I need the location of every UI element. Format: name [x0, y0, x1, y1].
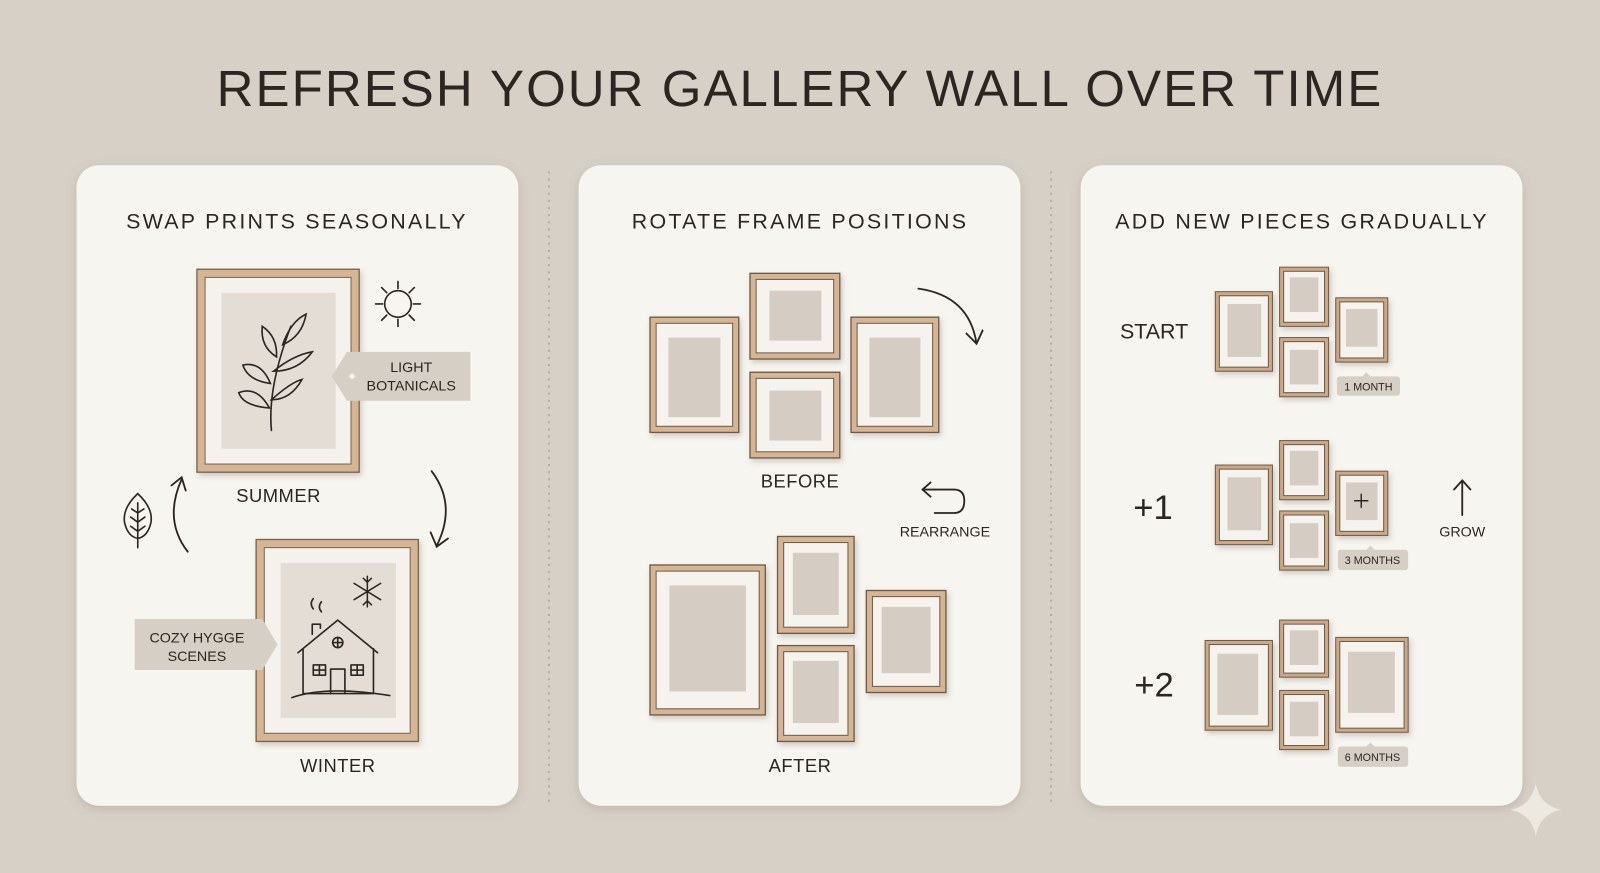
label: winter: WINTER: [300, 755, 375, 776]
callout: light botanicals: [332, 352, 470, 401]
+2 frames: [1205, 620, 1408, 750]
arrow: up cycle: [171, 477, 188, 552]
callout: cozy hygge scenes: [135, 619, 278, 670]
icon: rearrange: [922, 482, 964, 513]
heading: rotate: ROTATE FRAME POSITIONS: [632, 209, 968, 233]
panel: swap prints seasonally: [77, 165, 518, 806]
heading: swap prints: SWAP PRINTS SEASONALLY: [126, 209, 468, 233]
tag: 1 month: 1 MONTH: [1344, 382, 1392, 394]
icon: house: [292, 599, 390, 698]
tag: 3 months: 3 MONTHS: [1345, 555, 1400, 567]
title: REFRESH YOUR GALLERY WALL OVER TIME: [217, 60, 1383, 117]
label: +1: +1: [1133, 489, 1173, 527]
icon: sparkle: [1510, 783, 1561, 836]
label: before: BEFORE: [761, 470, 839, 491]
callout: light botanicals: LIGHT: [390, 360, 433, 376]
panel: add new pieces gradually: [1081, 165, 1522, 806]
heading: add new pieces: ADD NEW PIECES GRADUALLY: [1115, 209, 1489, 233]
callout: light botanicals: BOTANICALS: [367, 379, 456, 395]
arrow: down cycle: [431, 471, 448, 547]
tag: 3 months: [1338, 546, 1408, 570]
+1 frames: [1215, 441, 1388, 570]
icon: leaf: [124, 494, 151, 548]
callout: cozy hygge scenes: COZY HYGGE: [149, 631, 244, 647]
icon: grow arrow: [1454, 480, 1470, 515]
icon: sun: [376, 281, 420, 326]
label: +2: +2: [1134, 667, 1174, 705]
before frames: [650, 273, 939, 458]
label: after: AFTER: [769, 755, 831, 776]
tag: 6 months: 6 MONTHS: [1345, 752, 1400, 764]
label: start: START: [1120, 320, 1188, 344]
icon: leaf branch: [239, 314, 312, 430]
tag: 6 months: [1338, 742, 1408, 767]
label: rearrange: REARRANGE: [900, 524, 990, 540]
label: summer: SUMMER: [236, 485, 321, 506]
icon: snowflake: [354, 576, 381, 607]
arrow: rotate: [918, 289, 983, 344]
winter frame: [256, 540, 418, 741]
tag: 1 month: [1337, 372, 1400, 396]
start frames: [1215, 267, 1388, 397]
after frames: [650, 536, 946, 741]
label: grow: GROW: [1439, 524, 1486, 540]
summer frame: [197, 269, 359, 472]
callout: cozy hygge scenes: SCENES: [168, 649, 226, 665]
panel: rotate frame positions: [579, 165, 1020, 806]
